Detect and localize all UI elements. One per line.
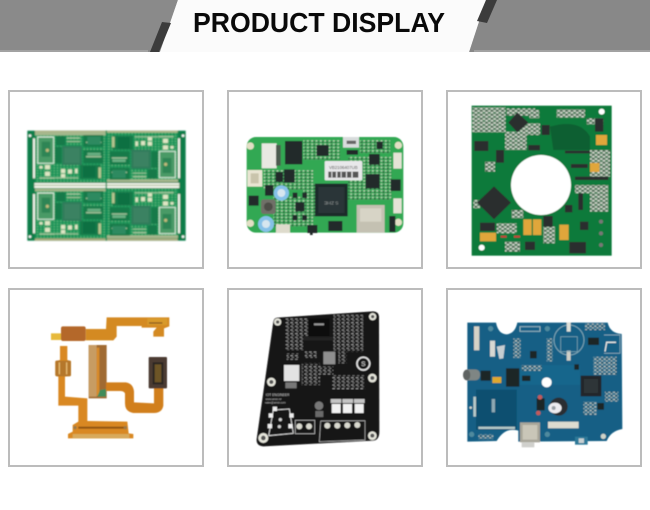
header banner [0, 0, 650, 52]
panel: green controller board [228, 91, 422, 268]
photo: four-up green PCB panel [27, 131, 186, 241]
photo: black IoT board: S [361, 361, 366, 368]
board text: sales@anrct.com [265, 401, 286, 405]
mounting holes [258, 313, 377, 443]
panel: black PCB [228, 289, 422, 466]
battery holder outline [554, 325, 584, 355]
photo: controller board with SD slot [247, 137, 403, 235]
small parts [478, 323, 618, 439]
terminal outlines [295, 420, 315, 434]
title: PRODUCT DISPLAY [193, 7, 445, 38]
banner left grey band [0, 0, 178, 52]
chips [481, 338, 604, 410]
white relay pads [332, 404, 364, 413]
chips [249, 141, 401, 235]
banner right dark accent [477, 0, 497, 23]
ICs [474, 112, 608, 253]
photo: ring-shaped assembled PCB [472, 106, 612, 256]
banner white title tab [160, 0, 486, 52]
upper flex strip [86, 317, 169, 340]
buzzer [550, 398, 568, 416]
traces tint [520, 365, 580, 385]
board text: IOT ENGINEER [266, 393, 290, 397]
left flex strip [55, 346, 133, 438]
board text: www.anrct.nz [266, 397, 282, 401]
power connector outline [269, 409, 293, 436]
right flex strip [106, 382, 163, 413]
tantalum capacitors [480, 135, 607, 241]
panel: blue PCB [447, 289, 641, 466]
panel: green panelised PCB [9, 91, 203, 268]
banner right grey band [469, 0, 650, 52]
photo: flex circuits [51, 317, 169, 438]
silkscreen blocks [285, 315, 365, 390]
panel: flexible orange PCB [9, 289, 203, 466]
capacitors [274, 185, 289, 201]
barcode label [325, 161, 362, 180]
panel: green board with round cut-out [447, 91, 641, 268]
photo: controller board with SD slot: S ZHE [323, 200, 339, 206]
component clusters [472, 107, 610, 252]
photo: black IoT board [257, 311, 379, 446]
module [476, 390, 517, 430]
connectors [262, 143, 277, 168]
electrolytic capacitor [463, 369, 480, 380]
holes and mounts [542, 377, 552, 387]
SD slot [357, 205, 385, 233]
board text [265, 393, 290, 405]
centre connector strip [89, 345, 107, 398]
cut-out and mounting holes [511, 155, 571, 215]
ribbon connectors [474, 326, 479, 350]
banner left dark accent [150, 22, 171, 52]
logo [357, 357, 370, 370]
logo [497, 345, 505, 359]
photo: controller board with SD slot: VB2106407UB [329, 165, 358, 170]
photo: blue assembled PCB [463, 322, 622, 447]
large pad [284, 365, 299, 381]
wifi module [520, 422, 540, 442]
